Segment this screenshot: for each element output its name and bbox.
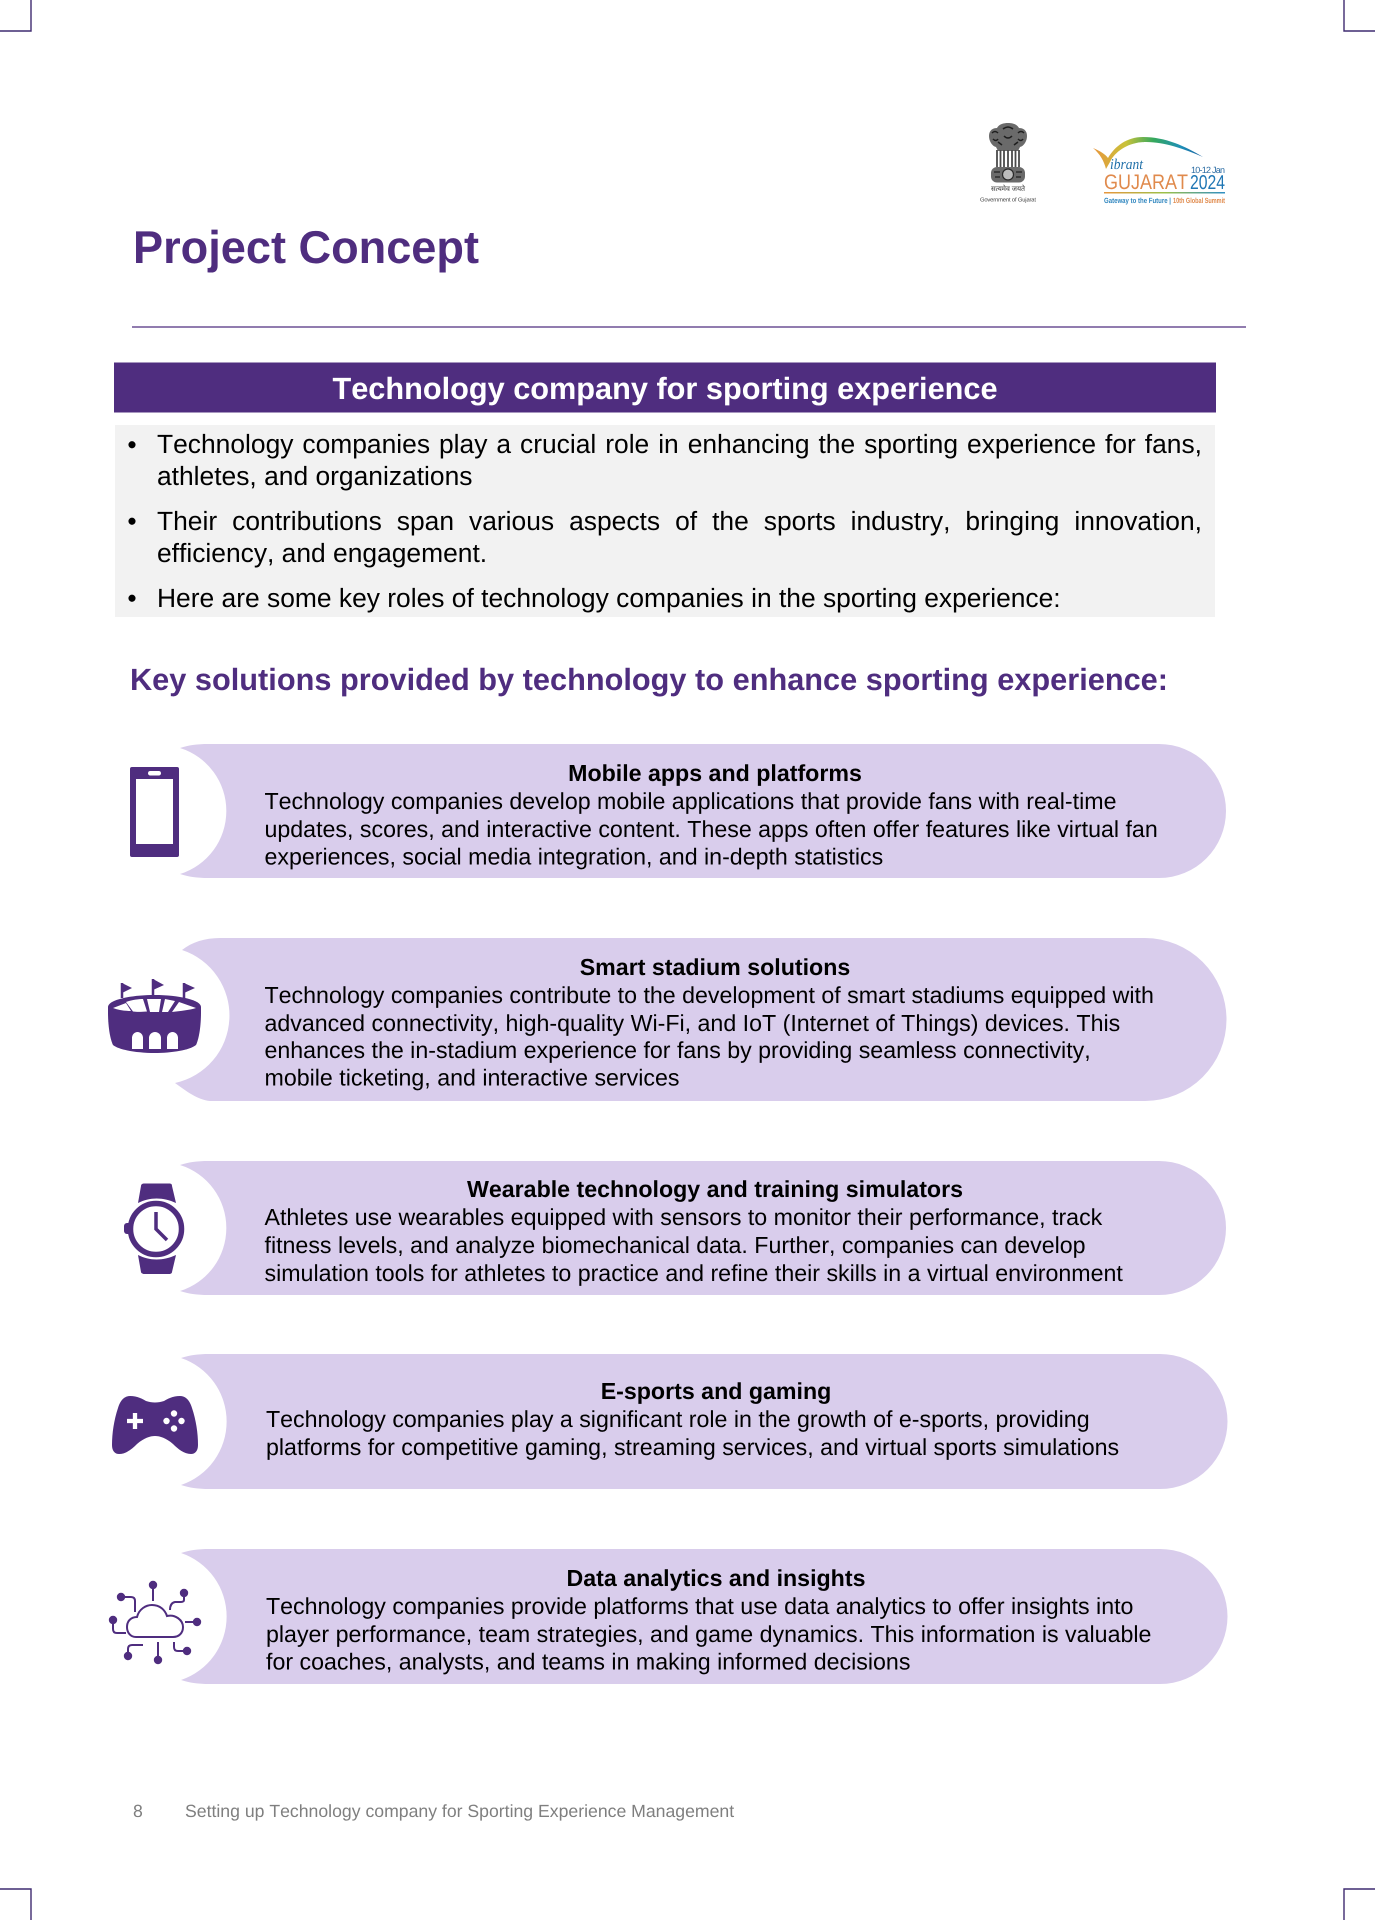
panel: smart stadium: mobile ticketing, and interactive services [264, 1064, 680, 1090]
banner heading: Technology company for sporting experience [332, 371, 998, 406]
logo: Vibrant Gujarat 2024 [1093, 137, 1225, 205]
panel: data analytics: Data analytics and insights [567, 1565, 865, 1591]
logo: Vibrant Gujarat 2024: GUJARAT [1104, 171, 1188, 194]
panel: data analytics [109, 1549, 1227, 1684]
panel: introduction bullets: • [127, 430, 137, 460]
panel: smart stadium: advanced connectivity, high-quality Wi-Fi, and IoT (Internet of Things) devices. This [264, 1010, 1120, 1036]
icon: mobile phone [130, 767, 179, 857]
section heading: Key solutions provided by technology to enhance sporting experience: [130, 662, 1168, 697]
logo: Vibrant Gujarat 2024: ibrant [1110, 157, 1144, 173]
panel: mobile apps: Mobile apps and platforms [568, 760, 862, 786]
panel: wearable technology [124, 1161, 1226, 1295]
icon: game controller [112, 1396, 198, 1454]
panel: mobile apps: updates, scores, and interactive content. These apps often offer features like virtual fan [264, 816, 1158, 842]
panel: introduction bullets: efficiency, and engagement. [157, 538, 487, 568]
logo: Government of Gujarat emblem [980, 123, 1036, 204]
panel: data analytics: player performance, team strategies, and game dynamics. This information is valuable [266, 1621, 1151, 1647]
panel: e-sports and gaming [112, 1354, 1228, 1489]
panel: e-sports and gaming: Technology companies play a significant role in the growth of e-sports, providing [266, 1406, 1090, 1432]
panel: introduction bullets: • [127, 583, 137, 613]
icon: smart watch [124, 1184, 182, 1274]
logo: Vibrant Gujarat 2024: 2024 [1190, 172, 1225, 194]
footer: Setting up Technology company for Sporting Experience Management [185, 1801, 734, 1821]
panel: introduction bullets: Their contributions span various aspects of the sports industry, bringing innovation, [157, 506, 1202, 536]
panel: wearable technology: fitness levels, and analyze biomechanical data. Further, companies can develop [264, 1232, 1086, 1258]
panel: mobile apps: experiences, social media integration, and in-depth statistics [264, 844, 883, 870]
panel: smart stadium: enhances the in-stadium experience for fans by providing seamless connectivity, [264, 1037, 1091, 1063]
panel: mobile apps [130, 744, 1226, 878]
panel: smart stadium [108, 938, 1226, 1101]
panel: introduction bullets: athletes, and organizations [157, 461, 472, 491]
panel: technology company banner [114, 362, 1216, 412]
panel: data analytics: for coaches, analysts, and teams in making informed decisions [266, 1648, 910, 1674]
panel: e-sports and gaming: platforms for competitive gaming, streaming services, and virtual sports simulations [266, 1434, 1119, 1460]
panel: introduction bullets: • [127, 506, 137, 536]
panel: wearable technology: Athletes use wearables equipped with sensors to monitor their performance, track [264, 1204, 1103, 1230]
title: Project Concept [133, 221, 479, 273]
logo: Vibrant Gujarat 2024: Gateway to the Future | [1104, 196, 1171, 205]
panel: wearable technology: Wearable technology and training simulators [467, 1176, 963, 1202]
icon: cloud network [109, 1581, 201, 1664]
icon: stadium [108, 979, 201, 1053]
panel: e-sports and gaming: E-sports and gaming [601, 1378, 831, 1404]
panel: smart stadium: Smart stadium solutions [580, 954, 850, 980]
panel: data analytics: Technology companies provide platforms that use data analytics to offer insights into [266, 1593, 1133, 1619]
panel: introduction bullets: Technology companies play a crucial role in enhancing the sporting experience for fans, [157, 429, 1202, 459]
logo: Government of Gujarat emblem: सत्यमेव जयते [991, 184, 1026, 193]
panel: mobile apps: Technology companies develop mobile applications that provide fans with real-time [264, 788, 1116, 814]
logo: Vibrant Gujarat 2024: 10th Global Summit [1173, 196, 1225, 205]
logo: Government of Gujarat emblem: Government of Gujarat [980, 196, 1036, 204]
panel: smart stadium: Technology companies contribute to the development of smart stadiums equipped with [264, 982, 1154, 1008]
logo: Vibrant Gujarat 2024: 10-12 Jan [1191, 165, 1225, 175]
panel: wearable technology: simulation tools for athletes to practice and refine their skills in a virtual environment [264, 1260, 1123, 1286]
panel: introduction bullets [115, 425, 1215, 617]
footer: 8 [133, 1801, 143, 1821]
panel: introduction bullets: Here are some key roles of technology companies in the sporting experience: [157, 583, 1061, 613]
